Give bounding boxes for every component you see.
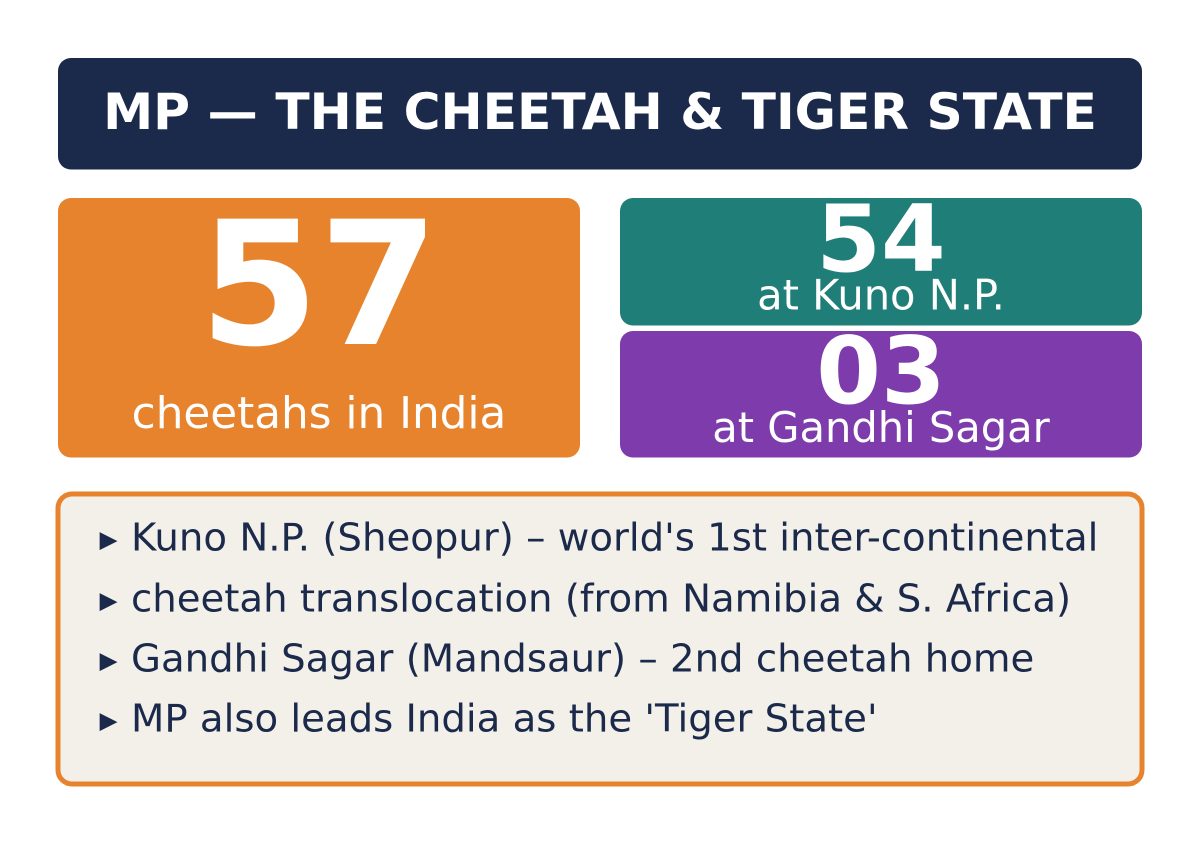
big number 57: 57 xyxy=(199,184,439,385)
number 54: 54 xyxy=(816,185,946,293)
bullet 4: MP also leads India as the 'Tiger State' xyxy=(131,696,878,742)
label: at Kuno N.P.: at Kuno N.P. xyxy=(757,270,1005,320)
panel: 57 cheetahs in India xyxy=(58,184,580,458)
panel: facts list xyxy=(58,494,1142,784)
bullet 2: cheetah translocation (from Namibia & S. Africa) xyxy=(131,576,1071,622)
title banner xyxy=(58,58,1142,170)
bullet 2: ▸ xyxy=(100,580,118,620)
bullet 1: Kuno N.P. (Sheopur) – world's 1st inter-continental xyxy=(131,516,1098,560)
number 03: 03 xyxy=(816,317,946,425)
label: at Gandhi Sagar: at Gandhi Sagar xyxy=(712,403,1051,452)
label: cheetahs in India: cheetahs in India xyxy=(132,388,506,439)
title: MP — THE CHEETAH & TIGER STATE xyxy=(103,82,1097,141)
panel: 54 at Kuno xyxy=(620,185,1142,326)
panel: 03 at Gandhi Sagar xyxy=(620,317,1142,458)
bullet 3: ▸ xyxy=(100,640,118,680)
bullet 1: ▸ xyxy=(100,518,118,560)
bullet 4: ▸ xyxy=(100,700,118,740)
bullet 3: Gandhi Sagar (Mandsaur) – 2nd cheetah home xyxy=(131,636,1034,682)
